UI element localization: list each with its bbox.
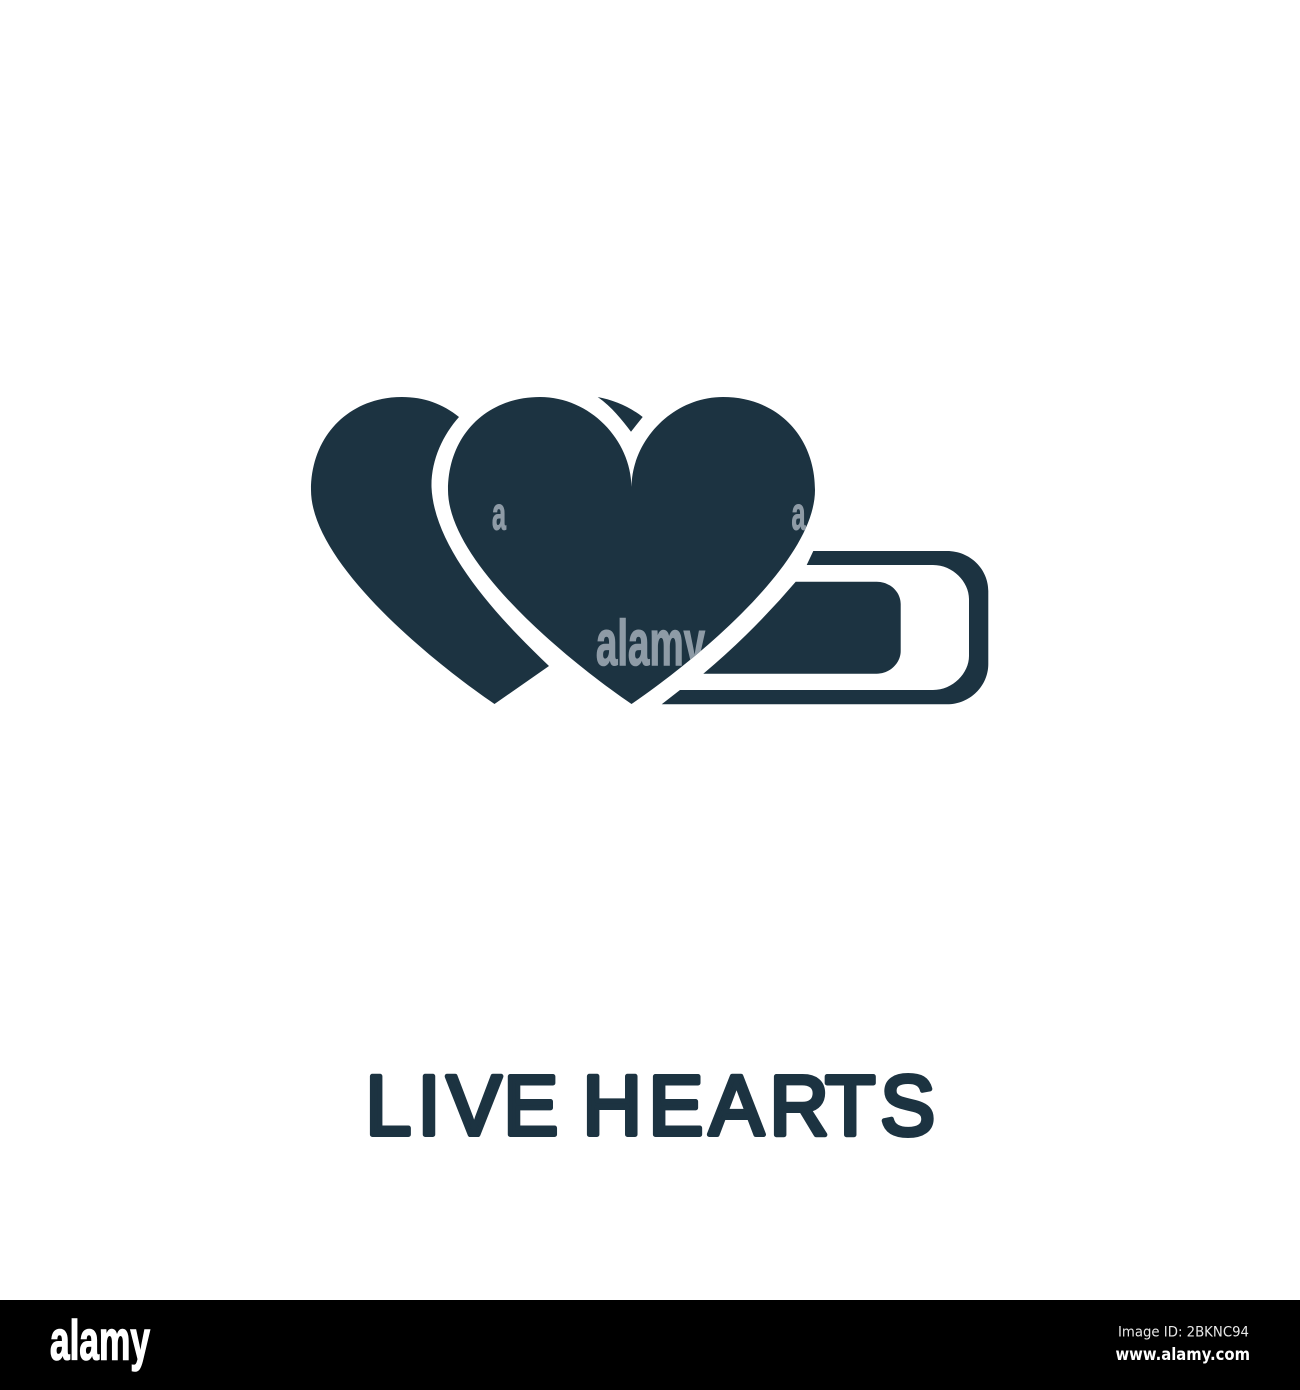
- website url: www.alamy.com: [1116, 1345, 1250, 1365]
- icon: back heart: [311, 397, 643, 704]
- icon: front heart: [448, 397, 815, 704]
- title: LIVE HEARTS: [366, 1059, 935, 1153]
- icon: battery charge bar: [703, 582, 901, 674]
- icon: battery outline: [662, 551, 988, 704]
- watermark: alamy marks on heart: a: [792, 488, 806, 540]
- footer logo: alamy: [50, 1308, 150, 1372]
- footer bar: [0, 1300, 1300, 1390]
- watermark: alamy marks on heart: alamy: [596, 607, 705, 679]
- icon: live hearts: [311, 397, 988, 704]
- watermark: alamy marks on heart: [492, 504, 806, 666]
- watermark: alamy marks on heart: a: [492, 488, 506, 540]
- image id: Image ID: 2BKNC94: [1118, 1325, 1249, 1341]
